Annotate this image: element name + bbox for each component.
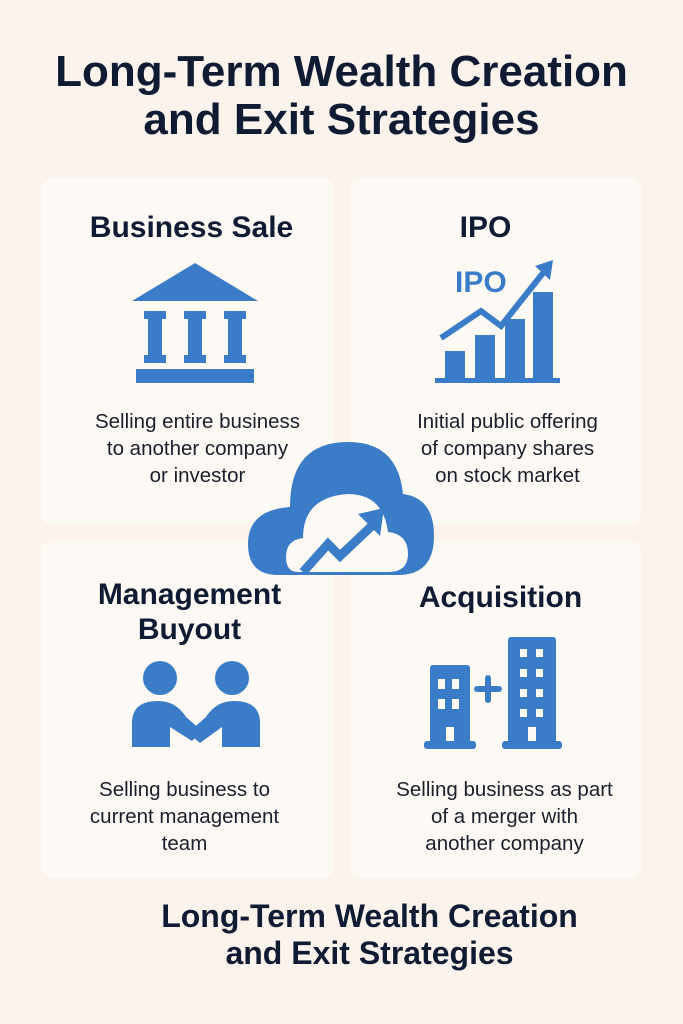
text: acquisition: of a merger with (431, 805, 578, 828)
title: Long-Term Wealth Creation (55, 47, 628, 96)
icon: handshake people (132, 661, 260, 747)
footer title (161, 898, 578, 971)
text: business sale (95, 410, 300, 487)
text: acquisition: another company (425, 832, 584, 855)
icon: central cloud with growth arrow (248, 442, 434, 575)
text: management buyout: current management (90, 805, 279, 828)
text: management buyout (90, 778, 279, 855)
text: acquisition (396, 778, 613, 855)
panel: IPO (350, 178, 641, 525)
heading: acquisition: Acquisition (419, 581, 582, 614)
heading: IPO: IPO (460, 211, 511, 244)
heading: management buyout: Management (98, 578, 281, 611)
text: IPO: Initial public offering (417, 410, 598, 433)
text: business sale: or investor (150, 464, 245, 487)
text: acquisition: Selling business as part (396, 778, 613, 801)
icon: IPO chart (435, 260, 560, 383)
text: IPO (417, 410, 598, 487)
title: and Exit Strategies (143, 95, 540, 144)
heading: management buyout (98, 578, 281, 646)
text: IPO: on stock market (435, 464, 580, 487)
icon: buildings (424, 637, 562, 749)
text: IPO: of company shares (421, 437, 594, 460)
text: business sale: Selling entire business (95, 410, 300, 433)
heading: business sale: Business Sale (90, 211, 293, 244)
panel: management buyout (42, 541, 333, 878)
footer title: Long-Term Wealth Creation (161, 898, 578, 934)
panel: business sale (42, 178, 333, 525)
heading: management buyout: Buyout (138, 613, 241, 646)
icon: bank (132, 263, 258, 383)
text: management buyout: team (162, 832, 207, 855)
footer title: and Exit Strategies (225, 935, 514, 971)
text: business sale: to another company (107, 437, 288, 460)
title (55, 47, 628, 144)
icon: IPO chart: IPO (455, 266, 507, 299)
text: management buyout: Selling business to (99, 778, 270, 801)
panel: acquisition (350, 541, 641, 878)
